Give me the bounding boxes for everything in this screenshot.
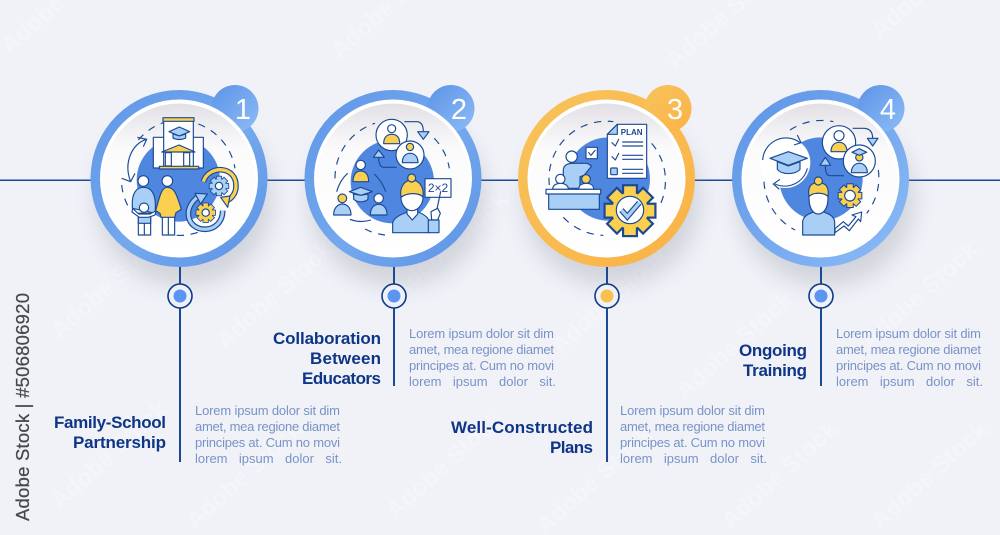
panel: step 4 (732, 85, 914, 386)
panel: step 3 (518, 85, 700, 462)
text block: step 3: principes at. Cum no movi (620, 435, 765, 450)
text block: step 1 (195, 403, 342, 466)
text block: step 3: Lorem ipsum dolor sit dim (620, 403, 765, 418)
text block: step 2: lorem ipsum dolor sit. (409, 374, 556, 389)
icon: plan, teacher and gear: PLAN (621, 128, 643, 137)
heading: Ongoing Training: Training (743, 361, 807, 380)
icon: ongoing training (760, 120, 879, 235)
heading: Ongoing Training: Ongoing (739, 341, 807, 360)
text block: step 2: amet, mea regione diamet (409, 342, 554, 357)
text block: step 3: amet, mea regione diamet (620, 419, 765, 434)
heading: Collaboration Between Educators: Educators (302, 369, 381, 388)
text block: step 3 (620, 403, 767, 466)
connector (393, 267, 395, 386)
watermark pattern: Adobe Stock (46, 396, 174, 514)
watermark pattern: Adobe Stock (181, 416, 309, 534)
ring (518, 90, 695, 267)
heading: Well-Constructed Plans: Well-Constructed (451, 418, 593, 437)
disc (742, 100, 900, 258)
number badge (858, 85, 904, 132)
text block: step 1: amet, mea regione diamet (195, 419, 340, 434)
connector (820, 267, 822, 386)
text block: step 1: lorem ipsum dolor sit. (195, 451, 342, 466)
number badge: 1 (235, 94, 251, 126)
heading: Collaboration Between Educators (273, 329, 381, 388)
timeline dot (809, 284, 833, 308)
circle shadow (738, 114, 914, 286)
text block: step 4: principes at. Cum no movi (836, 358, 981, 373)
heading: Collaboration Between Educators: Between (310, 349, 381, 368)
connector (179, 267, 181, 462)
text block: step 4: Lorem ipsum dolor sit dim (836, 326, 981, 341)
disc (314, 100, 472, 258)
heading: Ongoing Training (739, 341, 807, 380)
number badge (644, 85, 692, 132)
watermark pattern: Adobe Stock (381, 406, 509, 524)
watermark pattern: Adobe Stock (46, 226, 174, 344)
panel: step 2 (304, 85, 486, 386)
timeline dot (382, 284, 406, 308)
disc (528, 100, 686, 258)
text block: step 3: lorem ipsum dolor sit. (620, 451, 767, 466)
horizontal timeline (0, 180, 1000, 181)
number badge (212, 85, 258, 132)
watermark pattern: Adobe Stock (546, 241, 674, 359)
text block: step 2: Lorem ipsum dolor sit dim (409, 326, 554, 341)
stock credit: Adobe Stock | #506806920 (12, 293, 33, 521)
text block: step 2: principes at. Cum no movi (409, 358, 554, 373)
circle shadow (310, 114, 486, 286)
number badge: 4 (880, 94, 896, 126)
text block: step 4 (836, 326, 983, 389)
timeline dot (168, 284, 192, 308)
heading: Family-School Partnership (54, 413, 166, 452)
heading: Collaboration Between Educators: Collaboration (273, 329, 381, 348)
icon: educators collaborating (334, 119, 451, 235)
heading: Well-Constructed Plans (451, 418, 593, 457)
watermark pattern: Adobe Stock (671, 286, 799, 404)
ring (304, 90, 482, 267)
ring (732, 90, 909, 267)
number badge: 2 (451, 94, 467, 126)
disc (100, 100, 258, 258)
watermark pattern: Adobe Stock (386, 186, 514, 304)
heading: Family-School Partnership: Family-School (54, 413, 166, 432)
icon: educators collaborating: 2×2 (428, 181, 448, 195)
text block: step 4: lorem ipsum dolor sit. (836, 374, 983, 389)
circle shadow (524, 114, 700, 286)
heading: Family-School Partnership: Partnership (73, 433, 166, 452)
number badge: 3 (667, 94, 683, 126)
icon: family, school and gears (122, 118, 236, 235)
text block: step 4: amet, mea regione diamet (836, 342, 981, 357)
heading: Well-Constructed Plans: Plans (550, 438, 593, 457)
watermark pattern: Adobe Stock (211, 236, 339, 354)
text block: step 1: Lorem ipsum dolor sit dim (195, 403, 340, 418)
text block: step 2 (409, 326, 556, 389)
panel: step 1 (90, 85, 272, 462)
watermark pattern: Adobe Stock (716, 416, 844, 534)
circle shadow (96, 114, 272, 286)
connector (606, 267, 608, 462)
ring (90, 90, 268, 267)
icon: plan, teacher and gear (546, 121, 665, 235)
number badge (428, 85, 474, 132)
watermark pattern: Adobe Stock (866, 416, 994, 534)
watermark pattern: Adobe Stock (856, 236, 984, 354)
timeline dot (595, 284, 619, 308)
text block: step 1: principes at. Cum no movi (195, 435, 340, 450)
